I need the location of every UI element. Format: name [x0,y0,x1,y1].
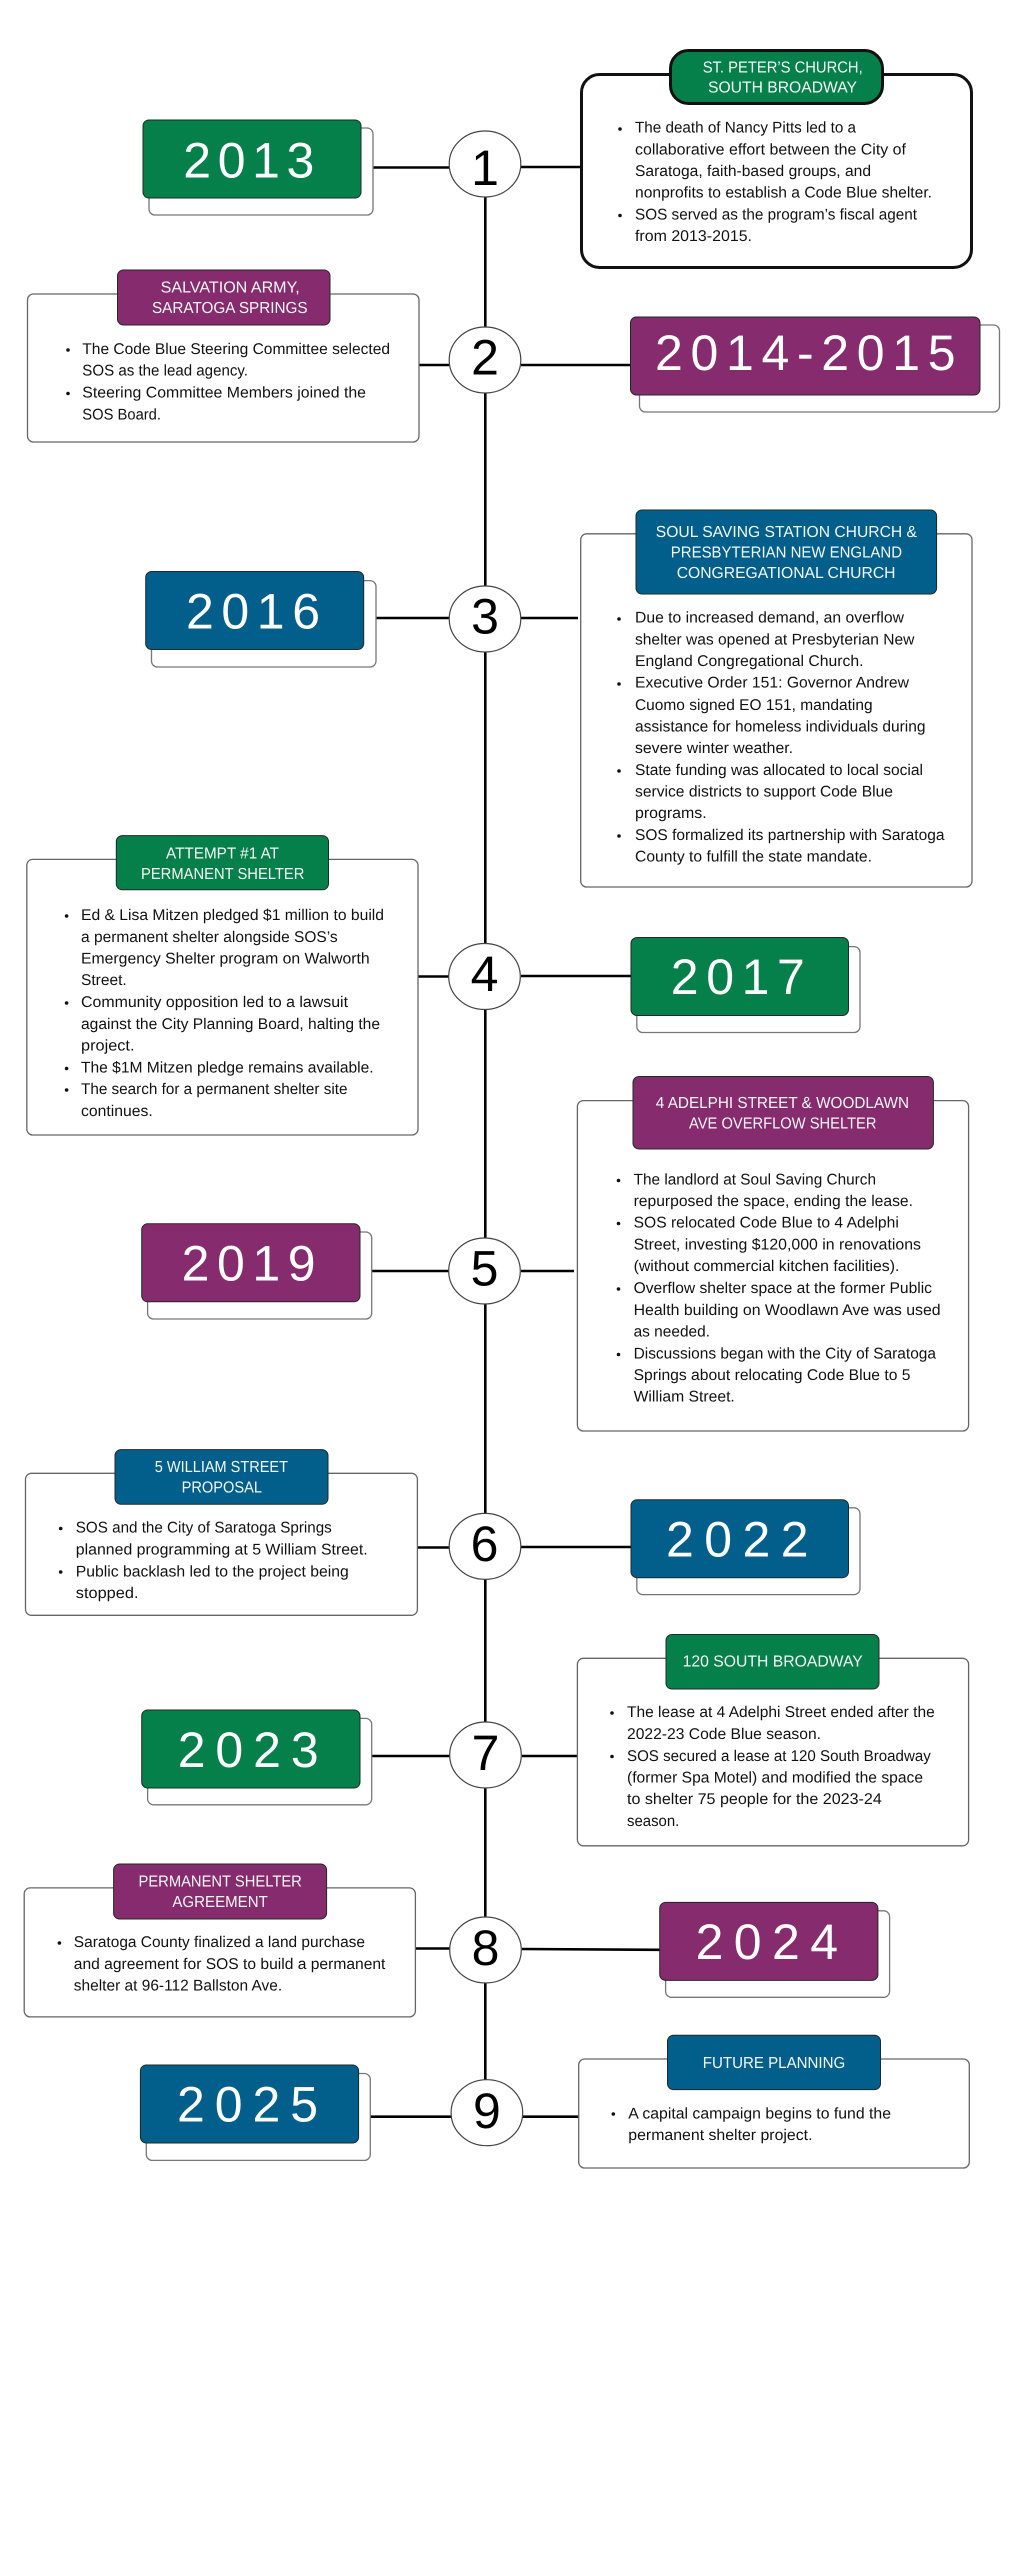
year badge 2025 [140,2065,370,2160]
connectors 6 [417,1546,631,1549]
body text 4: against the City Planning Board, halting the [81,1016,380,1033]
header: Permanent Shelter Agreement: AGREEMENT [172,1894,268,1911]
body text 6: SOS and the City of Saratoga Springs [76,1520,332,1537]
number 2: 2 [471,330,499,386]
connectors 5 [372,1270,574,1272]
body text 5: Health building on Woodlawn Ave was used [634,1302,941,1319]
header: Soul Saving Station: SOUL SAVING STATION CHURCH & [656,524,917,541]
connectors 8 [415,1948,660,1950]
number 9: 9 [473,2083,501,2139]
milestone 9: 2025 [140,2035,969,2168]
number 7: 7 [472,1725,499,1781]
header: Permanent Shelter Agreement [114,1864,327,1919]
milestone 4: 2017 [27,836,860,1135]
number 5 [449,1238,520,1304]
body text 7: season. [627,1813,679,1830]
body text 5: SOS relocated Code Blue to 4 Adelphi [634,1215,899,1232]
body text 5: (without commercial kitchen facilities). [634,1258,899,1275]
body text 4: project. [81,1038,134,1055]
panel: 120 South Broadway [577,1634,969,1846]
body text 3: State funding was allocated to local social [635,762,923,779]
year badge 2019: 2019 [182,1235,316,1291]
header: Future Planning [668,2035,880,2090]
year badge 2016 [146,572,376,667]
number 2 [449,327,521,393]
body text 9 [612,2105,891,2144]
number 7 [450,1722,521,1788]
header: Soul Saving Station: CONGREGATIONAL CHURCH [677,565,896,582]
year badge 2013: 2013 [183,132,314,188]
connectors 2 [419,364,630,366]
header: Permanent Shelter Agreement: PERMANENT SHELTER [138,1873,302,1890]
panel: Permanent Shelter Agreement [24,1864,415,2017]
header: Attempt #1: PERMANENT SHELTER [141,866,304,883]
connectors 7 [372,1755,578,1757]
body text 5: Springs about relocating Code Blue to 5 [634,1367,910,1384]
panel: Attempt #1 [27,836,418,1135]
year badge 2023: 2023 [178,1722,319,1778]
body text 8: Saratoga County finalized a land purchase [74,1934,365,1951]
header: 120 South Broadway: 120 SOUTH BROADWAY [683,1654,863,1671]
number 4: 4 [471,946,498,1002]
header: Future Planning: FUTURE PLANNING [703,2055,845,2072]
milestone 8: 2024 [24,1864,890,2017]
body text 5: The landlord at Soul Saving Church [634,1171,876,1188]
body text 7: SOS secured a lease at 120 South Broadway [627,1748,931,1765]
body text 6: Public backlash led to the project being [76,1563,349,1580]
header: Soul Saving Station: PRESBYTERIAN NEW ENGLAND [671,545,902,562]
body text 4: Street. [81,972,127,989]
body text 3: severe winter weather. [635,740,793,757]
header: 120 South Broadway [666,1634,879,1689]
body text 9: A capital campaign begins to fund the [628,2105,891,2122]
body text 6: stopped. [76,1585,138,1602]
year badge 2017: 2017 [671,949,805,1005]
year badge 2014-2015: 2014-2015 [655,325,956,381]
body text 9: permanent shelter project. [628,2127,812,2144]
header: Attempt #1 [116,836,328,890]
body text 3: England Congregational Church. [635,653,864,670]
body text 3: Due to increased demand, an overflow [635,610,905,627]
body text 7: (former Spa Motel) and modified the space [627,1770,923,1787]
panel: Soul Saving Station [581,510,972,887]
body text 6: planned programming at 5 William Street. [76,1541,368,1558]
milestone 7: 2023 [142,1634,969,1846]
milestone 1: 2013 [143,50,972,268]
body text 3 [617,610,945,866]
header: Soul Saving Station [636,510,937,594]
header: 5 William Street: PROPOSAL [182,1480,262,1496]
connectors 1 [373,166,581,169]
body text 4: Emergency Shelter program on Walworth [81,950,370,968]
body text 8 [58,1934,386,1994]
panel: 4 Adelphi Street [577,1076,969,1431]
header: Salvation Army [118,270,330,325]
number 6 [449,1513,521,1579]
year badge 2023 [142,1710,372,1805]
panel: Salvation Army [28,270,419,442]
number 8 [450,1917,521,1983]
number 6: 6 [471,1516,498,1572]
body text 5 [617,1171,941,1406]
year badge 2017 [631,938,860,1032]
number 3: 3 [471,588,499,644]
panel: St. Peter's Church [582,50,972,268]
body text 3: Cuomo signed EO 151, mandating [635,697,873,714]
body text 3: shelter was opened at Presbyterian New [635,631,915,648]
body text 8: shelter at 96-112 Ballston Ave. [74,1978,282,1994]
timeline spine [484,190,487,2090]
body text 2 [66,341,390,423]
body text 1: The death of Nancy Pitts led to a [635,120,856,137]
body text 7 [610,1704,935,1830]
header: 4 Adelphi Street: 4 ADELPHI STREET & WOODLAWN [656,1095,909,1112]
header: 5 William Street: 5 WILLIAM STREET [155,1459,288,1476]
panel: 5 William Street [26,1450,417,1615]
body text 3: assistance for homeless individuals during [635,718,926,736]
year badge 2024: 2024 [696,1914,838,1970]
body text 6 [59,1520,368,1602]
year badge 2024 [660,1902,890,1997]
body text 4: Community opposition led to a lawsuit [81,994,349,1011]
body text 2: The Code Blue Steering Committee selected [82,341,390,358]
body text 3: SOS formalized its partnership with Saratoga [635,827,945,844]
year badge 2019 [142,1224,372,1319]
body text 4: continues. [81,1103,153,1120]
number 3 [449,586,521,652]
year badge 2014-2015 [630,317,1000,412]
connectors 9 [370,2115,579,2118]
year badge 2022 [631,1500,860,1595]
connectors 4 [418,975,631,978]
number 1: 1 [471,140,499,196]
milestone 5: 2019 [142,1076,969,1431]
number 9 [451,2080,523,2146]
number 8: 8 [472,1920,499,1976]
header: Salvation Army: SARATOGA SPRINGS [152,300,308,317]
body text 5: as needed. [634,1324,710,1341]
body text 2: SOS Board. [82,406,161,423]
year badge 2013 [143,120,373,215]
header: St. Peter's Church: SOUTH BROADWAY [708,79,857,96]
body text 1: Saratoga, faith-based groups, and [635,163,871,180]
body text 1: collaborative effort between the City of [635,141,907,158]
body text 3: service districts to support Code Blue [635,784,893,801]
body text 2: SOS as the lead agency. [82,363,248,380]
body text 1 [618,120,932,245]
body text 8: and agreement for SOS to build a permanent [74,1956,386,1973]
body text 4: The $1M Mitzen pledge remains available. [81,1059,374,1076]
body text 7: 2022-23 Code Blue season. [627,1726,821,1743]
header: Salvation Army: SALVATION ARMY, [161,280,300,297]
body text 3: County to fulfill the state mandate. [635,849,872,866]
number 4 [449,944,520,1010]
body text 5: Overflow shelter space at the former Public [634,1280,932,1297]
header: 4 Adelphi Street [633,1076,933,1149]
header: St. Peter's Church: ST. PETER’S CHURCH, [703,59,863,76]
body text 7: to shelter 75 people for the 2023-24 [627,1791,882,1808]
body text 4: Ed & Lisa Mitzen pledged $1 million to build [81,907,384,924]
year badge 2016: 2016 [186,584,320,640]
body text 3: Executive Order 151: Governor Andrew [635,675,910,692]
body text 5: Discussions began with the City of Saratoga [634,1346,936,1362]
body text 5: repurposed the space, ending the lease. [634,1193,913,1210]
body text 1: from 2013-2015. [635,228,752,245]
body text 5: Street, investing $120,000 in renovations [634,1236,921,1253]
header: St. Peter's Church [670,50,882,104]
body text 4 [65,907,384,1120]
panel: Future Planning [579,2035,969,2168]
body text 5: William Street. [634,1389,735,1406]
body text 2: Steering Committee Members joined the [82,385,366,402]
number 5: 5 [471,1240,498,1296]
header: Attempt #1: ATTEMPT #1 AT [166,846,279,863]
body text 7: The lease at 4 Adelphi Street ended after the [627,1704,935,1721]
body text 1: nonprofits to establish a Code Blue shelter. [635,185,932,202]
body text 4: The search for a permanent shelter site [81,1081,348,1098]
body text 4: a permanent shelter alongside SOS’s [81,929,338,946]
milestone 2: 2014-2015 [28,270,1000,442]
body text 3: programs. [635,805,707,822]
body text 1: SOS served as the program’s fiscal agent [635,206,918,223]
header: 4 Adelphi Street: AVE OVERFLOW SHELTER [689,1116,876,1132]
year badge 2025: 2025 [177,2077,318,2133]
milestone 6: 2022 [26,1450,860,1615]
connectors 3 [376,617,578,619]
milestone 3: 2016 [146,510,972,887]
year badge 2022: 2022 [666,1511,809,1567]
header: 5 William Street [115,1450,328,1504]
number 1 [449,131,521,197]
